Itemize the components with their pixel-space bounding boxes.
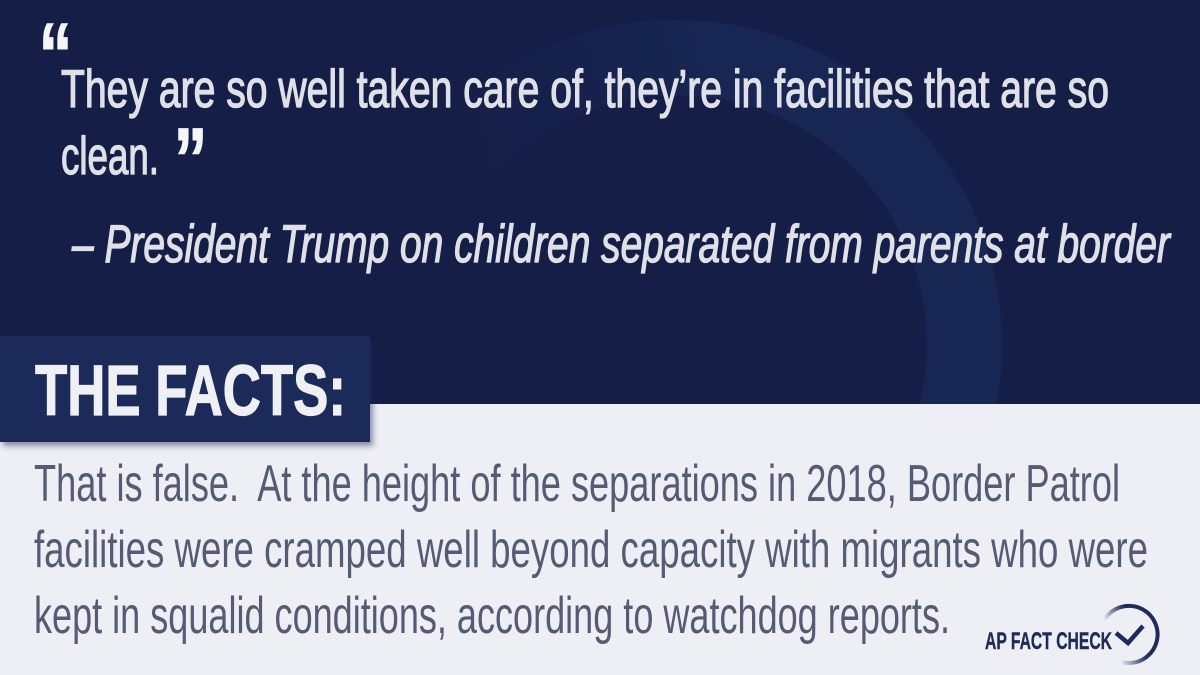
panel: dark quote background — [0, 0, 1200, 404]
quote text: clean. — [61, 127, 159, 186]
logo: AP Fact Check — [985, 606, 1158, 663]
icon: check mark in ring — [1104, 606, 1158, 663]
logo wordmark: AP FACT CHECK — [985, 628, 1112, 655]
heading panel: the facts — [0, 336, 370, 442]
panel: light facts background — [0, 404, 1200, 675]
facts body text — [34, 455, 1148, 645]
decorative ring in background — [598, 20, 1002, 404]
closing quote mark: ” — [174, 109, 208, 209]
opening quote mark: “ — [38, 4, 72, 104]
quote text — [61, 60, 1109, 186]
heading panel: the facts: THE FACTS: — [35, 352, 346, 431]
